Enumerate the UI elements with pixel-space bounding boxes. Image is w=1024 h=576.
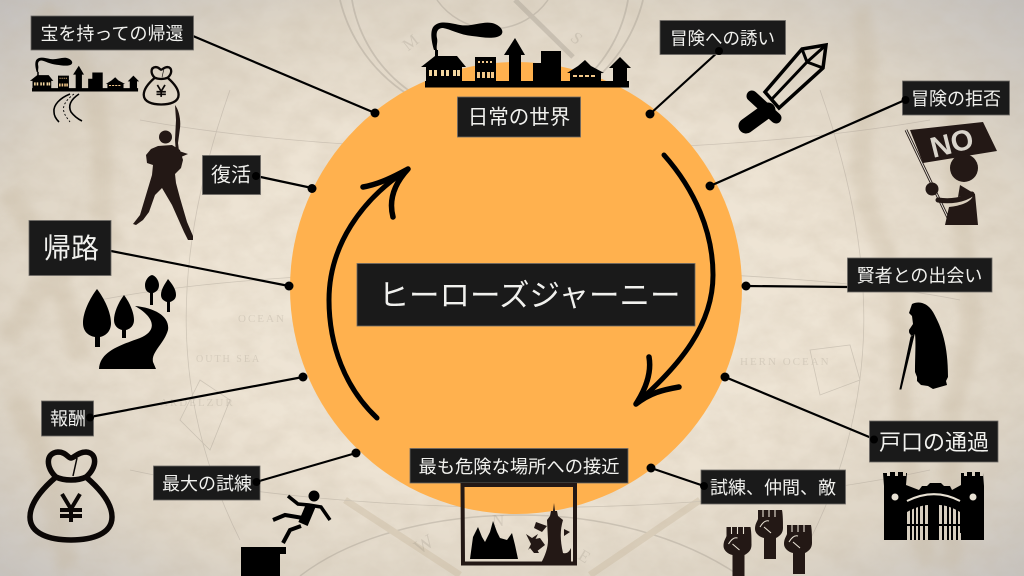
connector: 帰路	[111, 251, 294, 290]
label: 冒険への誘い: 冒険への誘い	[670, 28, 775, 48]
label: 戸口の通過	[870, 421, 998, 462]
connector: 復活	[256, 176, 316, 193]
connector: 冒険の拒否	[706, 100, 905, 190]
label: 試練、仲間、敵: 試練、仲間、敵	[710, 478, 836, 498]
central orange circle	[290, 62, 742, 514]
connector: 試練、仲間、敵	[646, 464, 704, 486]
label: 最も危険な場所への接近: 最も危険な場所への接近	[418, 456, 620, 477]
label: 帰路: 帰路	[43, 233, 99, 264]
connector: 戸口の通過	[720, 372, 874, 439]
background: parchment map with rope: E	[575, 546, 594, 567]
label: 報酬	[42, 401, 94, 436]
label: 最大の試練	[154, 466, 260, 500]
label: 宝を持っての帰還: 宝を持っての帰還	[40, 24, 184, 44]
label: 帰路	[29, 220, 111, 276]
label: 冒険の拒否: 冒険の拒否	[911, 89, 1001, 109]
title: ヒーローズジャーニー: ヒーローズジャーニー	[379, 279, 680, 313]
background: parchment map with rope: N	[492, 511, 504, 530]
label: 冒険への誘い	[660, 20, 786, 55]
icon: sword	[746, 45, 826, 126]
connector: 最大の試練	[256, 448, 360, 482]
label: 賢者との出会い: 賢者との出会い	[857, 266, 982, 286]
label: 宝を持っての帰還	[31, 16, 194, 50]
label: 賢者との出会い	[848, 258, 992, 292]
label: 最も危険な場所への接近	[410, 448, 628, 483]
label: 戸口の通過: 戸口の通過	[879, 430, 989, 455]
icon: person falling off a ledge	[241, 490, 330, 576]
icon: old sage with cane	[900, 303, 948, 389]
icon: small town with road	[30, 58, 139, 122]
connector: 冒険への誘い	[646, 51, 719, 118]
icon: trees and road	[83, 275, 176, 369]
background: parchment map with rope: ARDELZUR	[160, 397, 235, 409]
background: parchment map with rope: W	[410, 530, 438, 559]
icon: person with NO flag	[906, 122, 997, 225]
label: 日常の世界	[458, 97, 580, 137]
background: parchment map with rope: OCEAN	[238, 313, 286, 325]
label: 試練、仲間、敵	[700, 470, 846, 504]
title: ヒーローズジャーニー	[357, 264, 695, 326]
label: 復活	[202, 156, 260, 194]
background: parchment map with rope: HERN OCEAN	[740, 356, 831, 368]
icon: money bag small	[144, 67, 179, 105]
connector: 宝を持っての帰還	[193, 36, 380, 118]
icon: three fists	[724, 510, 812, 576]
icon: castle and tower in frame	[462, 485, 575, 564]
background: parchment map with rope: OUTH SEA	[196, 354, 261, 365]
icon: castle gate	[883, 472, 984, 540]
background: parchment map with rope: S	[567, 28, 586, 49]
icon: town skyline	[421, 22, 631, 87]
label: 復活: 復活	[211, 164, 251, 186]
icon: person with NO flag: NO	[927, 123, 977, 165]
connector: 報酬	[90, 372, 308, 417]
label: 日常の世界: 日常の世界	[468, 106, 570, 129]
background: parchment map with rope: M	[399, 30, 422, 55]
connector: 賢者との出会い	[742, 282, 848, 290]
arrow: clockwise left	[329, 169, 408, 418]
label: 報酬: 報酬	[50, 409, 86, 429]
arrow: clockwise right	[636, 155, 713, 404]
icon: money bag large	[30, 452, 112, 540]
label: 冒険の拒否	[902, 81, 1010, 115]
label: 最大の試練: 最大の試練	[162, 474, 252, 494]
icon: hero silhouette with sword	[133, 105, 193, 240]
